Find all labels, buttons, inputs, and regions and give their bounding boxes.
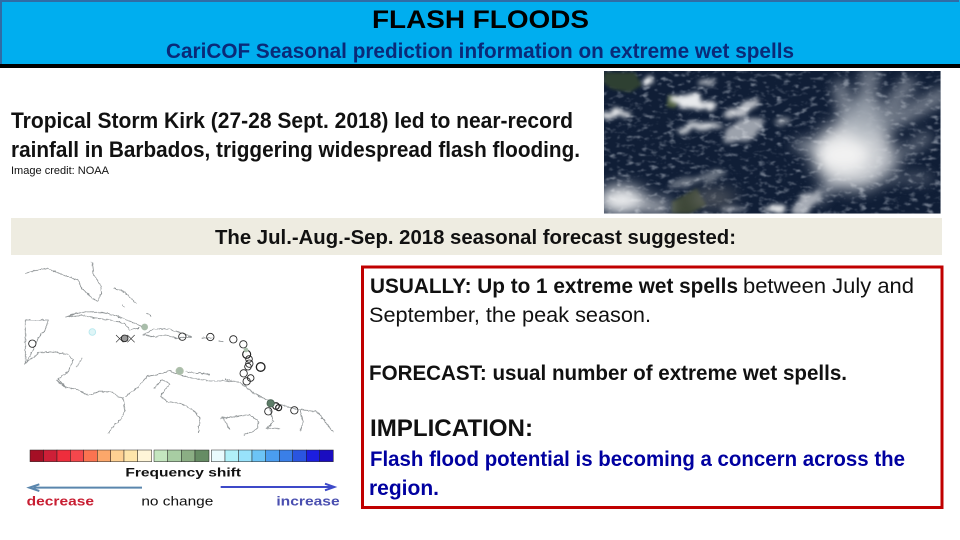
title: FLASH FLOODS (372, 6, 589, 34)
usual statement: USUALLY: Up to 1 extreme wet spells (370, 275, 738, 298)
no change label: no change (141, 495, 213, 509)
usual statement: between July and (743, 275, 914, 298)
text block: Tropical Storm Kirk (11, 108, 580, 162)
arrow: increase (221, 484, 334, 490)
image credit: Image credit: NOAA (11, 165, 110, 177)
implication text: region. (369, 477, 439, 500)
coastlines (25, 262, 333, 435)
implication text (369, 448, 905, 500)
panel: forecast details (362, 267, 942, 508)
forecast heading band: The Jul.-Aug.-Sep. 2018 seasonal forecast suggested: (215, 227, 736, 249)
satellite image of Tropical Storm Kirk (598, 71, 941, 220)
forecast heading band (11, 218, 942, 255)
storm feeder bands (800, 78, 940, 198)
usual statement: September, the peak season. (369, 304, 651, 327)
usual statement (369, 275, 914, 327)
text block: Tropical Storm Kirk: Tropical Storm Kirk (27-28 Sept. 2018) led to near-record (11, 108, 573, 133)
colour scale (30, 450, 333, 462)
decrease label: decrease (27, 495, 94, 509)
station markers (29, 324, 298, 415)
arrow: decrease (29, 484, 142, 491)
increase label: increase (276, 495, 340, 509)
map of the Caribbean with station markers (25, 262, 333, 435)
legend: frequency shift (27, 450, 340, 509)
implication heading: IMPLICATION: (370, 415, 533, 442)
subtitle: CariCOF Seasonal prediction information on extreme wet spells (166, 40, 794, 63)
scale label: Frequency shift (125, 465, 241, 479)
implication text: Flash flood potential is becoming a concern across the (370, 448, 905, 471)
forecast statement: FORECAST: usual number of extreme wet spells. (369, 362, 847, 385)
header banner (0, 0, 960, 68)
text block: Tropical Storm Kirk: rainfall in Barbados, triggering widespread flash flooding. (11, 137, 580, 162)
